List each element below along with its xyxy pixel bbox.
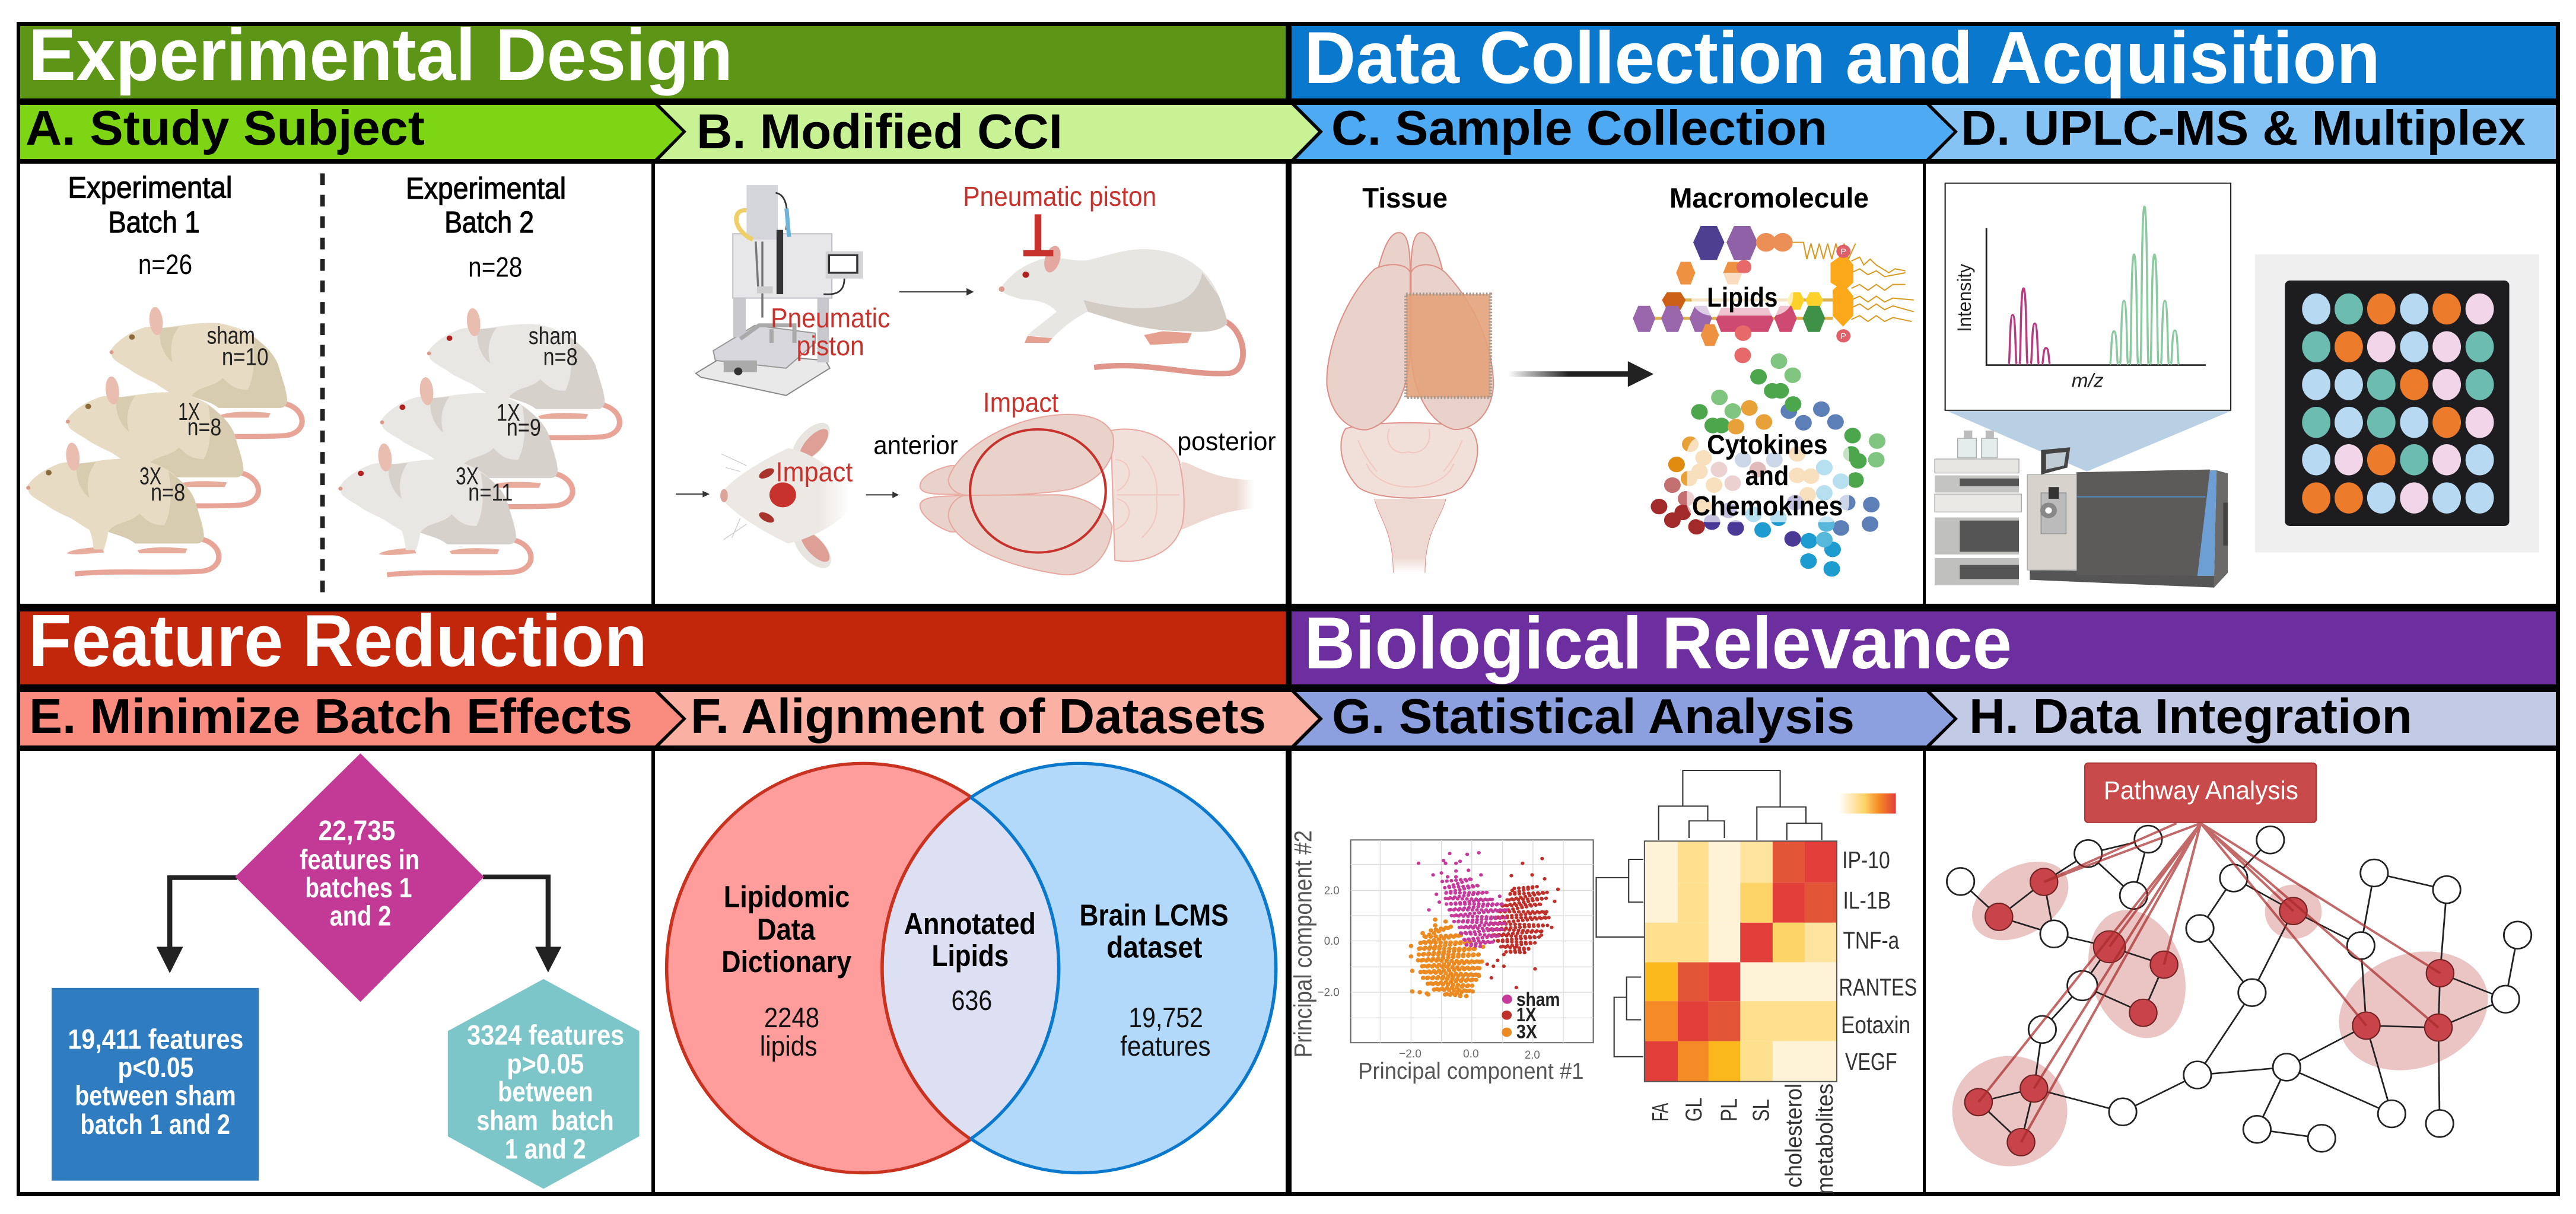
subheading C: [1296, 100, 1954, 159]
subheading H: [1931, 689, 2556, 745]
batch 2 group labels: n=11: [468, 479, 513, 506]
subheading H: H. Data Integration: [1969, 689, 2412, 744]
hexagon: non significant features: p>0.05: [507, 1049, 584, 1080]
label: cytokines and chemokines: and: [1745, 461, 1789, 492]
box: pathway analysis: Pathway Analysis: [2104, 776, 2298, 805]
heatmap column labels: [1648, 1084, 1838, 1194]
label: lipidomic data dictionary: Lipidomic: [724, 880, 850, 914]
scatter axis ticks: [1318, 885, 1540, 1062]
scatter axis ticks: 2.0: [1324, 885, 1340, 897]
batch 2 group labels: [456, 322, 578, 506]
rats batch 2: [338, 308, 619, 575]
label: anterior: anterior: [873, 431, 958, 460]
count: 19,752 features: [1120, 1002, 1211, 1062]
scatter axis ticks: 2.0: [1525, 1049, 1540, 1062]
batch 2 heading: Batch 2: [444, 206, 534, 240]
label: impact on brain: Impact: [983, 388, 1058, 418]
hexagon: non significant features: between: [498, 1077, 593, 1108]
hexagon: non significant features: sham batch: [476, 1105, 614, 1136]
batch 2 group labels: n=9: [507, 414, 541, 441]
label: lipids: Lipids: [1707, 282, 1777, 313]
panel F: alignment of datasets: [655, 751, 1286, 1192]
batch 1 heading: [68, 171, 232, 281]
arrow: tissue to macromolecule: [1508, 361, 1653, 387]
box: significant features: 19,411 features: [68, 1024, 243, 1055]
icon: lipids: [1633, 226, 1914, 363]
batch 1 group labels: n=8: [187, 413, 221, 441]
panel H: data integration: [1926, 751, 2556, 1192]
heatmap column labels: PL: [1717, 1098, 1742, 1121]
hexagon: non significant features: 1 and 2: [505, 1134, 586, 1165]
arrow: instrument to rat: [899, 289, 972, 295]
diamond: all features: 22,735: [319, 815, 395, 846]
label: lipidomic data dictionary: Dictionary: [721, 945, 852, 979]
network nodes: enriched: [1965, 868, 2454, 1156]
box: pathway analysis: [2085, 763, 2316, 823]
subheading C: C. Sample Collection: [1331, 100, 1827, 155]
batch 1 heading: n=26: [138, 249, 192, 281]
subheading A: A. Study Subject: [26, 100, 425, 155]
scatter axis ticks: −2.0: [1318, 986, 1340, 999]
colour scale: [1839, 794, 1896, 814]
venn diagram: [667, 763, 1276, 1173]
heatmap column labels: GL: [1681, 1098, 1707, 1121]
y axis title: Principal component #2: [1289, 830, 1317, 1057]
subheading E: E. Minimize Batch Effects: [29, 689, 632, 744]
arrow: to rat head: [676, 492, 708, 496]
arrow: diamond to blue box: [157, 878, 237, 973]
batch 1 heading: Experimental: [68, 171, 232, 205]
dendrograms: [1597, 770, 1822, 1057]
band: Biological Relevance: Biological Relevance: [1304, 603, 2012, 684]
beam from instrument to spectrum: [1947, 411, 2231, 471]
scatter axis ticks: 0.0: [1324, 935, 1340, 948]
heatmap row labels: [1839, 846, 1917, 1075]
count: 2248 lipids: [760, 1002, 819, 1062]
batch 2 heading: Experimental: [406, 172, 566, 206]
icon: impactor instrument: [696, 185, 863, 396]
highlighted pathway regions: [1952, 845, 2509, 1166]
pathway links: [1979, 823, 2440, 1142]
subheading D: D. UPLC-MS & Multiplex: [1961, 100, 2526, 155]
heatmap column labels: FA: [1648, 1103, 1674, 1121]
box: significant features: p<0.05: [118, 1052, 193, 1083]
heatmap row labels: RANTES: [1839, 974, 1917, 1000]
hexagon: non significant features: [448, 979, 640, 1188]
chart: PCA scatter: [1351, 840, 1594, 1043]
label: cytokines and chemokines: Cytokines: [1707, 430, 1828, 460]
label: lipidomic data dictionary: [721, 880, 852, 979]
box: significant features: [52, 988, 259, 1181]
batch 1 group labels: n=8: [151, 479, 185, 506]
heatmap row labels: Eotaxin: [1841, 1011, 1910, 1038]
heatmap column labels: SL: [1749, 1099, 1774, 1121]
batch 2 group labels: 1X: [497, 399, 520, 426]
icon: multiplex plate: [2255, 254, 2539, 553]
label: pneumatic piston on instrument: piston: [797, 332, 864, 362]
scatter legend: sham: [1516, 989, 1560, 1011]
diamond: all features: batches 1: [305, 873, 412, 904]
panel C: sample collection: [1292, 164, 1923, 604]
batch 1 group labels: 1X: [178, 399, 200, 425]
batch 1 group labels: n=10: [222, 343, 268, 370]
icon: lipids: P: [1841, 247, 1846, 256]
batch 1 group labels: [139, 322, 268, 506]
label: pneumatic piston over rat: Pneumatic piston: [963, 181, 1156, 212]
icon: mass spectrometer: [2027, 447, 2228, 588]
chart: mass spectrum: [1945, 183, 2231, 410]
label: posterior: posterior: [1177, 426, 1276, 456]
band: Data Collection and Acquisition: Data Collection and Acquisition: [1304, 17, 2380, 99]
batch 2 group labels: 3X: [456, 463, 479, 489]
hexagon: non significant features: 3324 features: [467, 1020, 624, 1051]
label: pneumatic piston on instrument: Pneumatic: [771, 303, 890, 334]
subheading B: B. Modified CCI: [697, 104, 1063, 159]
band: Feature Reduction: Feature Reduction: [28, 600, 647, 682]
heatmap row labels: TNF-a: [1843, 927, 1900, 954]
chart: mass spectrum: Intensity: [1954, 263, 1975, 332]
subheading A: [20, 100, 682, 159]
label: annotated lipids: [904, 907, 1036, 973]
icon: LC stack: [1935, 431, 2021, 585]
scatter legend: 3X: [1516, 1021, 1537, 1043]
label: cytokines and chemokines: Chemokines: [1692, 492, 1843, 522]
batch 2 heading: n=28: [468, 252, 522, 283]
box: significant features: between sham: [75, 1081, 236, 1111]
panel D: UPLC-MS and multiplex: [1926, 164, 2556, 604]
batch 2 heading: [406, 172, 566, 283]
label: impact on head: Impact: [775, 457, 853, 487]
count: 19,752 features: features: [1120, 1031, 1211, 1062]
label: brain LCMS dataset: Brain LCMS: [1080, 898, 1229, 932]
diamond: all features: features in: [300, 845, 419, 875]
count: 2248 lipids: 2248: [764, 1002, 819, 1034]
network nodes: unselected: [1947, 826, 2532, 1152]
icon: brain vertical: [1327, 232, 1493, 573]
label: tissue: Tissue: [1362, 183, 1448, 214]
diamond: all features: [235, 753, 484, 1002]
panel G: statistical analysis: [1289, 751, 1923, 1194]
icon: cytokine and chemokine spheres: [1650, 353, 1885, 576]
scatter legend: [1502, 989, 1560, 1043]
panel B: modified CCI: [655, 164, 1286, 604]
label: annotated lipids: Lipids: [932, 939, 1009, 973]
band: Experimental Design: [20, 14, 1286, 98]
label: cytokines and chemokines: [1692, 430, 1843, 522]
batch 1 group labels: sham: [207, 322, 255, 349]
subheading G: G. Statistical Analysis: [1332, 689, 1855, 744]
icon: rat receiving impact: [998, 244, 1243, 374]
tissue sample patch: [1406, 294, 1490, 397]
subheading B: [660, 104, 1318, 159]
count: 19,752 features: 19,752: [1128, 1002, 1203, 1034]
icon: brain horizontal: [920, 415, 1254, 575]
heatmap column labels: metabolites: [1812, 1084, 1838, 1194]
band: Feature Reduction: [20, 600, 1286, 684]
scatter axis ticks: −2.0: [1399, 1048, 1421, 1060]
band: Experimental Design: Experimental Design: [28, 14, 733, 96]
arrow: to brain: [866, 492, 898, 497]
label: macromolecule: Macromolecule: [1669, 183, 1869, 214]
heatmap row labels: IP-10: [1842, 846, 1890, 874]
network edges: [1961, 839, 2518, 1142]
diamond: all features: and 2: [330, 901, 391, 932]
box: significant features: batch 1 and 2: [80, 1110, 230, 1140]
x axis title: Principal component #1: [1358, 1057, 1583, 1084]
arrow: diamond to hexagon: [483, 877, 561, 973]
batch 2 group labels: sham: [529, 322, 577, 349]
band: Biological Relevance: [1292, 603, 2556, 684]
label: brain LCMS dataset: [1080, 898, 1229, 964]
subheading F: F. Alignment of Datasets: [691, 689, 1266, 744]
panel E: minimize batch effects: [20, 751, 651, 1192]
icon: rat head top view: [720, 417, 851, 574]
label: annotated lipids: Annotated: [904, 907, 1036, 941]
chart: heatmap: [1645, 841, 1837, 1082]
chart: mass spectrum: m/z: [2072, 369, 2104, 391]
icon: piston: [1023, 214, 1053, 256]
panel A: study subject: [20, 164, 651, 604]
dashed divider: [319, 173, 326, 594]
heatmap row labels: VEGF: [1845, 1048, 1897, 1075]
label: lipidomic data dictionary: Data: [757, 913, 816, 947]
scatter axis ticks: 0.0: [1463, 1048, 1479, 1060]
batch 2 group labels: n=8: [543, 343, 578, 370]
icon: lipids: P: [1841, 332, 1846, 340]
label: brain LCMS dataset: dataset: [1106, 931, 1203, 964]
heatmap column labels: cholesterol: [1781, 1084, 1807, 1188]
batch 1 heading: Batch 1: [108, 206, 200, 240]
impact circle: [970, 429, 1106, 553]
count: 636: 636: [951, 986, 992, 1017]
scatter legend: 1X: [1516, 1004, 1537, 1026]
batch 1 group labels: 3X: [139, 463, 161, 489]
label: pneumatic piston on instrument: [771, 303, 890, 362]
heatmap row labels: IL-1B: [1843, 887, 1891, 914]
count: 2248 lipids: lipids: [760, 1031, 818, 1062]
rats batch 1: [26, 307, 302, 574]
